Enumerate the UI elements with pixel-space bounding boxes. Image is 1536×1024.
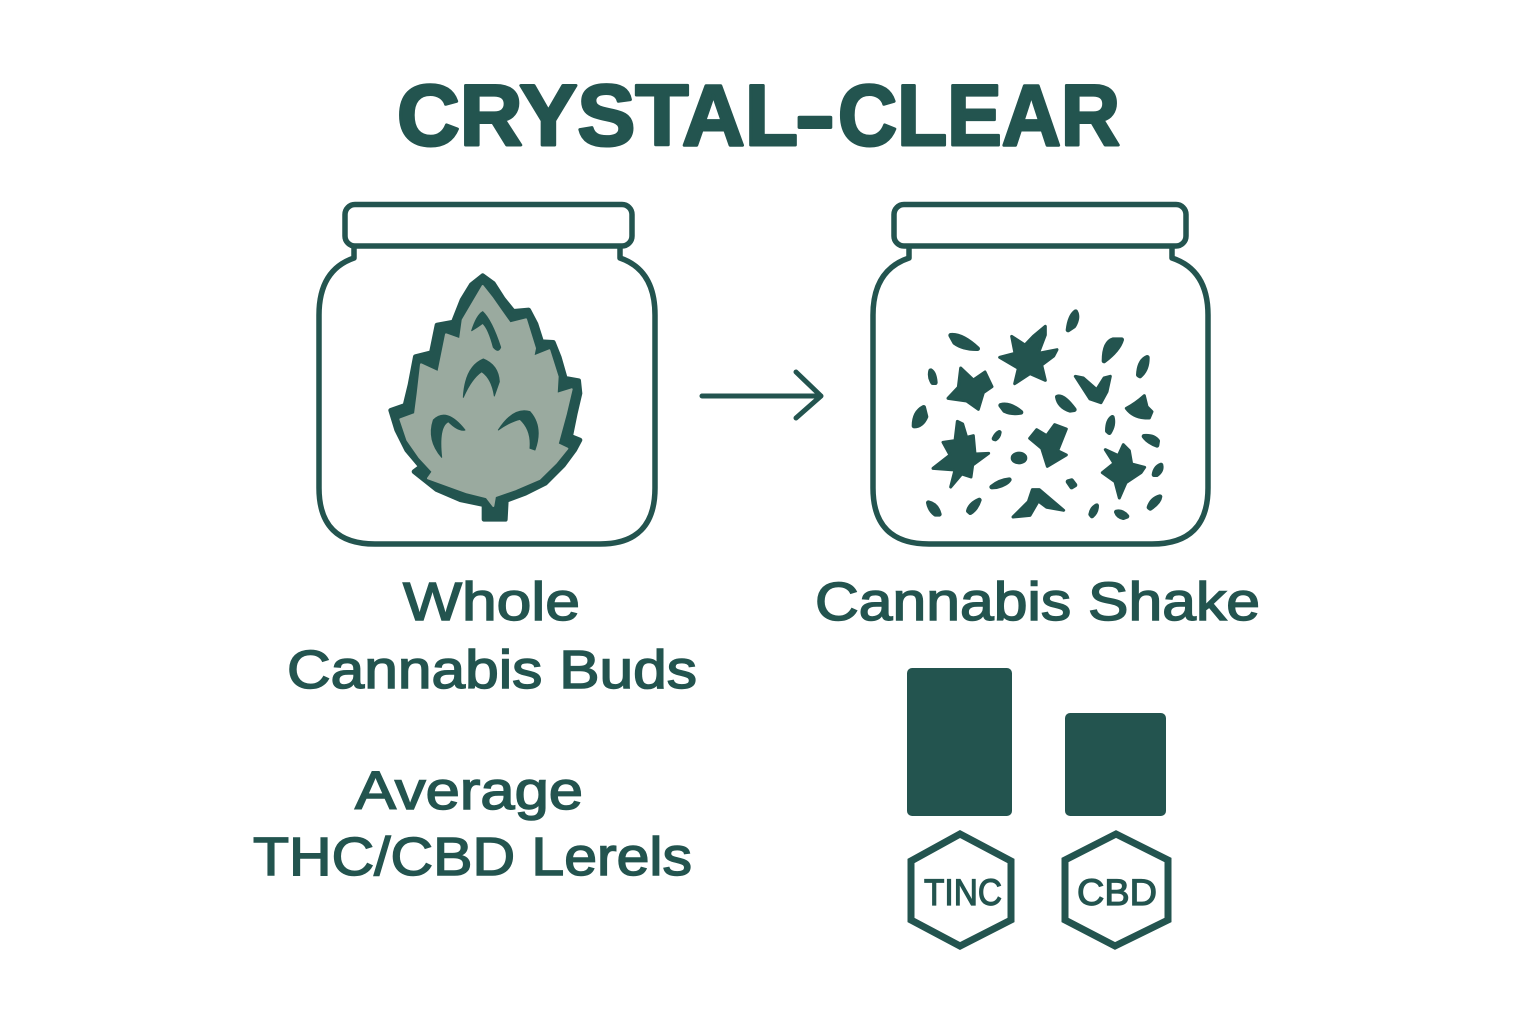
title <box>397 68 1120 164</box>
label: cannabis shake: Cannabis Shake <box>815 572 1260 632</box>
title: CLEAR <box>838 68 1120 164</box>
label: whole cannabis buds <box>287 572 697 700</box>
arrow <box>702 372 821 418</box>
jar lid <box>894 204 1186 246</box>
jar body <box>873 247 1208 544</box>
label: average levels <box>253 761 692 887</box>
jar lid <box>345 204 632 246</box>
icon: CBD hexagon badge: CBD <box>1077 872 1157 913</box>
bar: CBD <box>1065 713 1166 816</box>
panel: shake jar <box>873 204 1208 544</box>
panel: whole buds jar <box>319 204 655 544</box>
bar chart: THC and CBD <box>907 668 1166 816</box>
icon: cannabis bud <box>391 276 580 519</box>
icon: THC hexagon badge <box>911 834 1011 946</box>
icon: shake fragments <box>914 312 1161 518</box>
label: whole cannabis buds: Whole <box>403 572 580 632</box>
bud fill <box>400 286 572 506</box>
title: CRYSTAL <box>397 68 798 164</box>
label: average levels: Average <box>355 761 583 821</box>
bud outline <box>391 276 580 519</box>
title: - <box>795 68 835 164</box>
bar: THC <box>907 668 1012 816</box>
label: average levels: THC/CBD Lerels <box>253 827 692 887</box>
jar body <box>319 247 655 544</box>
label: whole cannabis buds: Cannabis Buds <box>287 640 697 700</box>
icon: CBD hexagon badge <box>1065 834 1168 946</box>
bud leaf marks <box>431 312 538 457</box>
icon: THC hexagon badge: TINC <box>924 872 1002 913</box>
